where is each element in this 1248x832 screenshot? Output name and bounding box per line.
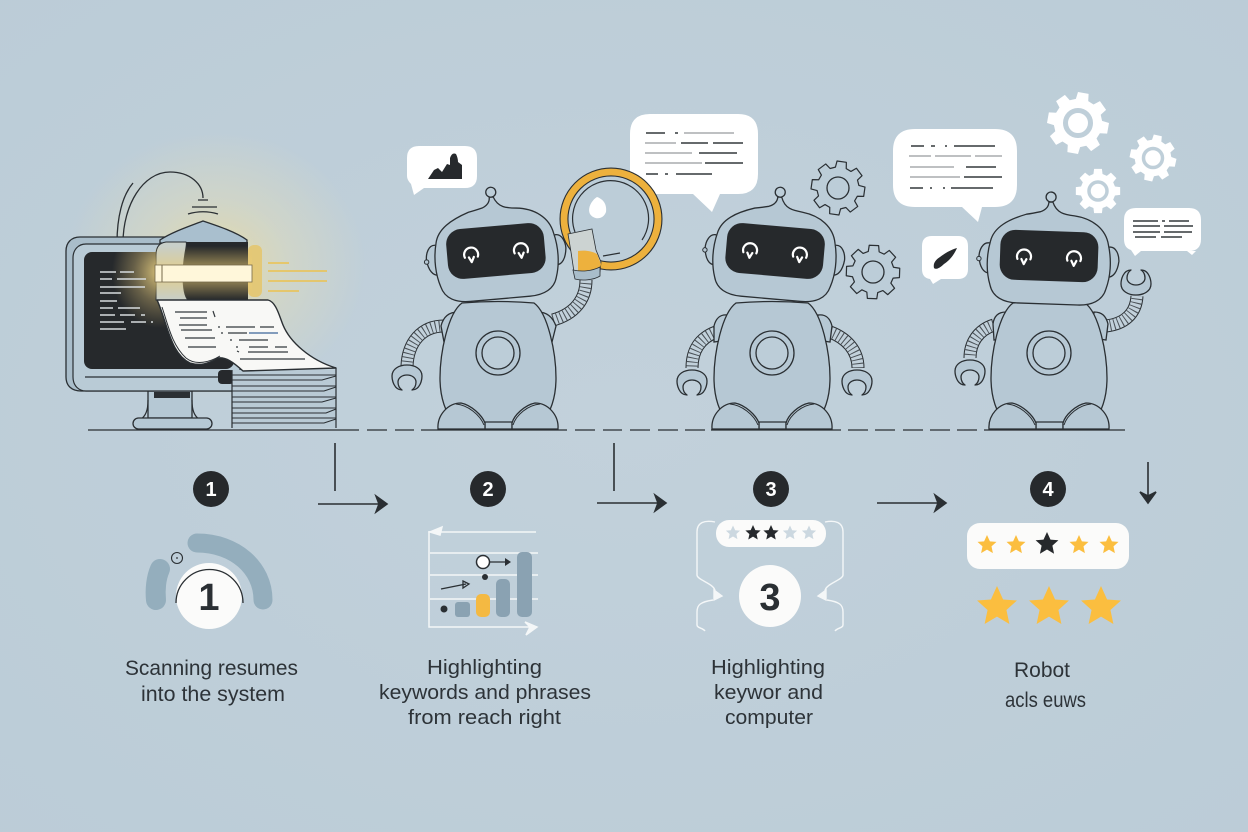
- arrow 1 to 2: [318, 443, 387, 512]
- step 3 number circle: [739, 565, 801, 627]
- magnifying glass: [564, 172, 658, 280]
- step 2 caption: from reach right: [408, 707, 561, 729]
- step 3 stars: [726, 525, 816, 539]
- robot 4 left claw: [955, 360, 985, 385]
- robot 3 shoulders: [714, 315, 832, 342]
- robot 4 right claw: [1121, 270, 1151, 295]
- step 4 badge: [1030, 471, 1066, 507]
- step 4 caption: acls euws: [1005, 689, 1086, 712]
- robot 2 head: [418, 181, 570, 305]
- step 2 caption: [379, 657, 591, 729]
- step 1 badge: 1: [205, 479, 217, 501]
- step 3 caption: Highlighting: [711, 657, 825, 679]
- step 4 large stars: [977, 586, 1121, 624]
- step 3 icon: rating and number: 3: [759, 577, 781, 619]
- monitor and scanner illustration: [66, 172, 336, 429]
- robot 2 shoulders: [441, 312, 556, 342]
- robot 4 shoulders: [993, 312, 1108, 340]
- step 3 icon: rating and number: [697, 520, 843, 631]
- step 1 caption: into the system: [141, 683, 285, 706]
- step 2 icon: bar chart: [429, 527, 538, 635]
- outline gear lower: [845, 244, 901, 300]
- robot 3 right claw: [842, 370, 872, 395]
- paper stack: [232, 368, 336, 428]
- robot 3 right arm: [830, 332, 858, 368]
- robot 2 left claw: [392, 365, 422, 390]
- scanner head: [155, 221, 262, 300]
- step 2 badge: [470, 471, 506, 507]
- step 2 caption: Highlighting: [427, 657, 542, 679]
- arrow 3 to 4: [877, 495, 946, 511]
- robot 3 head: [699, 181, 850, 305]
- step 3 brackets: [697, 521, 843, 631]
- scan beams: [268, 263, 327, 291]
- robot 2 with magnifier: [392, 172, 658, 429]
- step 1 caption: Scanning resumes: [125, 657, 298, 680]
- robot 3 with gears: [677, 158, 901, 429]
- arrow 2 to 3: [597, 443, 666, 511]
- step 1 icon: gauge: [156, 543, 263, 629]
- step 4 icon: star rating: [967, 523, 1129, 624]
- robot 4 waving: [955, 190, 1151, 429]
- step 1 caption: [125, 657, 298, 706]
- baseline timeline: [88, 429, 1125, 431]
- white gear right: [1126, 131, 1180, 185]
- screen code lines: [100, 272, 153, 329]
- robot 3 left claw: [677, 370, 707, 395]
- speech bubble: text large right: [893, 129, 1017, 222]
- robot 2 body: [438, 302, 558, 429]
- robot 3 body: [712, 302, 832, 429]
- step 3 caption: keywor and: [714, 682, 823, 704]
- speech bubble: text top centre: [630, 114, 758, 212]
- step 3 badge: [753, 471, 789, 507]
- computer monitor: [66, 216, 240, 429]
- scanner glow: [65, 130, 365, 400]
- robot 2 right arm: [553, 280, 586, 320]
- step 4 small stars: [978, 532, 1118, 554]
- step 3 badge: 3: [765, 479, 777, 501]
- step 1 icon: gauge: 1: [198, 577, 220, 619]
- power cables: [117, 172, 218, 243]
- robot 3 left arm: [692, 332, 716, 368]
- speech bubble: mountain icon: [407, 146, 477, 195]
- arrow 4 down: [1140, 462, 1156, 503]
- step 2 caption: keywords and phrases: [379, 682, 591, 704]
- robot 4 right arm: [1106, 296, 1137, 326]
- robot 4 body: [989, 302, 1109, 429]
- step 1 badge: [193, 471, 229, 507]
- white gear large: [1043, 88, 1113, 158]
- step 2 badge: 2: [482, 479, 494, 501]
- step 4 star pill: [967, 523, 1129, 569]
- speech bubble: feather icon: [922, 236, 968, 284]
- outline gear upper: [808, 158, 868, 218]
- step 3 caption: [711, 657, 825, 729]
- resume page: [157, 300, 336, 371]
- speech bubble: text small right: [1124, 208, 1201, 256]
- step 3 caption: computer: [725, 707, 813, 729]
- step 4 caption: Robot: [1014, 659, 1070, 682]
- robot 4 head: [975, 190, 1121, 306]
- robot 4 left arm: [970, 325, 994, 358]
- step 4 badge: 4: [1042, 479, 1054, 501]
- robot 2 left arm: [407, 326, 444, 366]
- step 4 caption: [1005, 659, 1086, 712]
- step 3 star pill: [716, 520, 826, 547]
- white gear centre: [1076, 169, 1120, 213]
